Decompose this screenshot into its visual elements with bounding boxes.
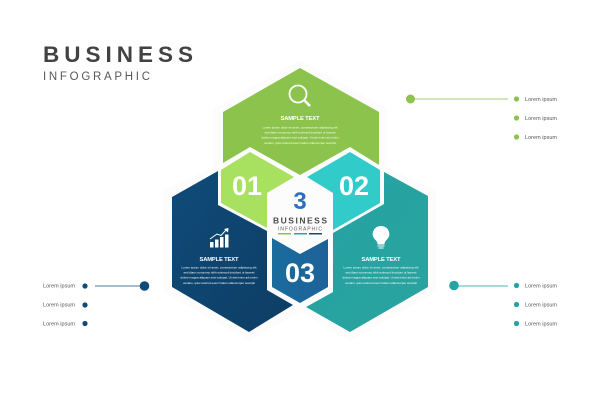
center label: 3 <box>293 188 307 215</box>
text block: green panel: veniam, quis nostrud exerci tation ullamcorper suscipit <box>264 141 336 145</box>
callout: teal list <box>449 281 557 328</box>
text block: green panel <box>262 125 339 145</box>
text block: teal panel: dolore magna aliquam erat volutpat. Ut wisi enim ad minim <box>342 276 420 280</box>
heading: navy panel: SAMPLE TEXT <box>200 257 239 263</box>
text block: green panel: Lorem ipsum dolor sit amet, consectetuer adipiscing elit <box>262 125 338 129</box>
text block: navy panel <box>180 265 258 285</box>
center label <box>273 188 327 234</box>
center label: INFOGRAPHIC <box>278 226 322 232</box>
title: INFOGRAPHIC <box>43 71 150 83</box>
callout: navy list <box>43 281 149 328</box>
text block: navy panel: sed diam nonummy nibh euismod tincidunt ut laoreet <box>184 270 255 274</box>
icon: light bulb <box>373 226 389 248</box>
panel: navy left hexagon <box>172 171 293 332</box>
heading: teal panel: SAMPLE TEXT <box>362 257 401 263</box>
text block: teal panel <box>342 265 420 285</box>
icon: magnifier <box>290 86 310 106</box>
callout: teal list: Lorem ipsum <box>525 322 557 328</box>
callout: teal list: Lorem ipsum <box>525 284 557 290</box>
text block: navy panel: veniam, quis nostrud exerci tation ullamcorper suscipit <box>183 281 255 285</box>
callout: navy list: Lorem ipsum <box>43 322 75 328</box>
text block: navy panel: Lorem ipsum dolor sit amet, consectetuer adipiscing elit <box>182 265 257 269</box>
panel: teal right hexagon <box>306 172 428 332</box>
callout: teal list: Lorem ipsum <box>525 302 557 308</box>
heading: green panel: SAMPLE TEXT <box>280 116 320 122</box>
panel: green top hexagon <box>223 68 379 175</box>
panel: 02 cyan hexagon <box>307 152 380 230</box>
callout: green list: Lorem ipsum <box>525 116 557 122</box>
callout: navy list: Lorem ipsum <box>43 302 75 308</box>
callout: green list: Lorem ipsum <box>525 135 557 141</box>
callout: navy list: Lorem ipsum <box>43 284 75 290</box>
panel: 01 light green hexagon <box>221 152 294 228</box>
text block: teal panel: Lorem ipsum dolor sit amet, consectetuer adipiscing elit <box>344 265 419 269</box>
number 01: 01 <box>232 171 262 201</box>
number 02: 02 <box>339 171 369 201</box>
text block: navy panel: dolore magna aliquam erat volutpat. Ut wisi enim ad minim <box>180 276 258 280</box>
text block: green panel: dolore magna aliquam erat volutpat. Ut wisi enim ad minim <box>262 136 339 140</box>
text block: green panel: sed diam nonummy nibh euismod tincidunt ut laoreet <box>264 130 336 134</box>
center label: BUSINESS <box>273 216 327 226</box>
callout: green list <box>406 94 557 141</box>
text block: teal panel: veniam, quis nostrud exerci tation ullamcorper suscipit <box>345 281 417 285</box>
panel: 03 blue chevron hexagon <box>272 238 328 303</box>
icon: rising bar chart <box>210 228 228 248</box>
callout: green list: Lorem ipsum <box>525 97 557 103</box>
text block: teal panel: sed diam nonummy nibh euismod tincidunt ut laoreet <box>346 270 417 274</box>
halo behind hexagons <box>163 60 436 341</box>
number 03: 03 <box>285 258 315 288</box>
title <box>43 42 193 83</box>
title: BUSINESS <box>43 42 193 67</box>
